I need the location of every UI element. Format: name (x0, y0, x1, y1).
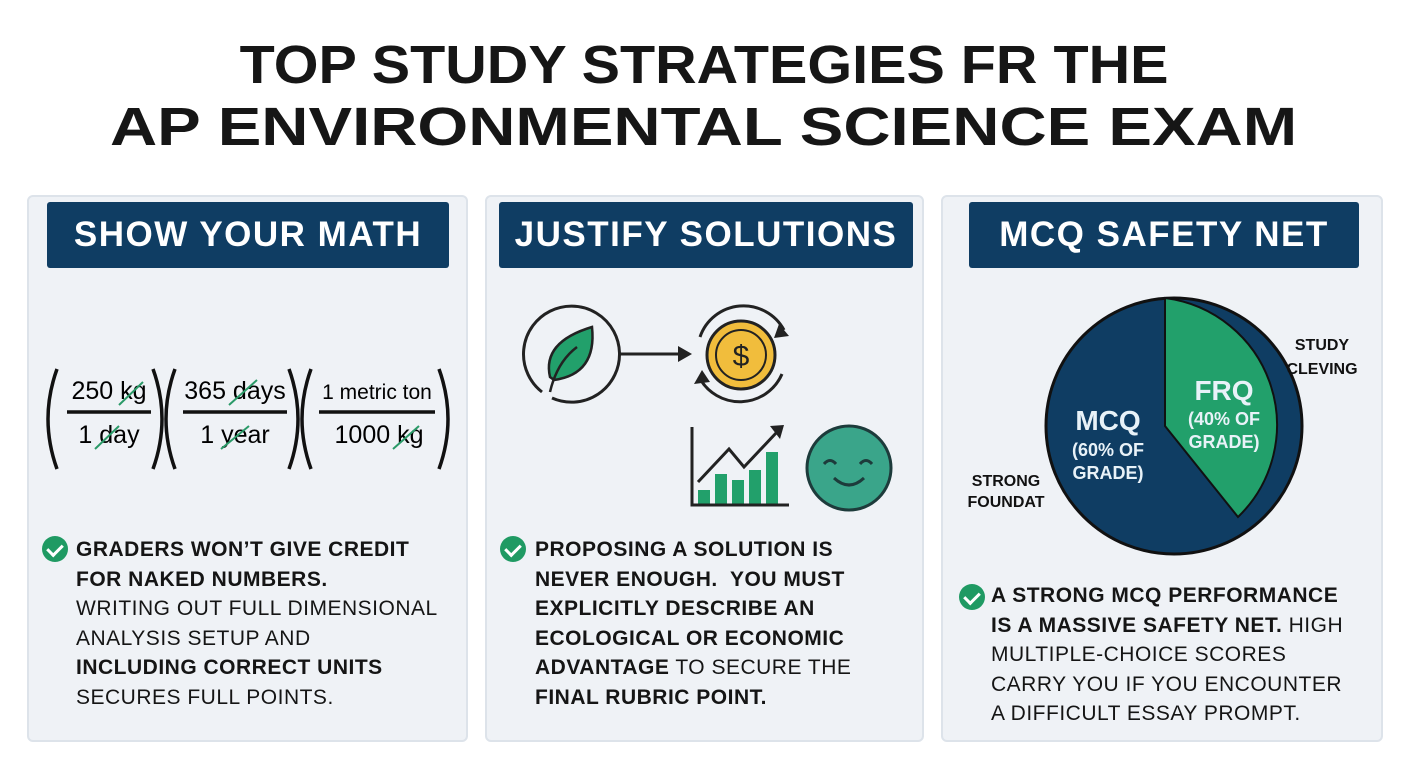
text block: FOR NAKED NUMBERS. (76, 568, 328, 590)
pie chart (967, 296, 1358, 556)
text block: ANALYSIS SETUP AND (76, 626, 311, 650)
text block: ADVANTAGE TO SECURE THE (535, 656, 851, 679)
heading: justify solutions (499, 202, 913, 268)
heading: show your math: SHOW YOUR MATH (74, 215, 422, 254)
pie chart: FOUNDAT (967, 494, 1045, 511)
icon: check (959, 584, 985, 610)
title (110, 35, 1298, 157)
text block (76, 538, 438, 708)
text block: NEVER ENOUGH. YOU MUST (535, 568, 845, 590)
icon: check (42, 536, 68, 562)
pie chart: STUDY (1295, 337, 1349, 354)
heading: show your math (47, 202, 449, 268)
text block: A STRONG MCQ PERFORMANCE (991, 584, 1338, 607)
text block: MULTIPLE-CHOICE SCORES (991, 643, 1286, 666)
pie chart: CLEVING (1286, 361, 1358, 378)
text block: CARRY YOU IF YOU ENCOUNTER (991, 672, 1342, 696)
text block: SECURES FULL POINTS. (76, 686, 334, 708)
text block: GRADERS WON’T GIVE CREDIT (76, 538, 409, 561)
text block: INCLUDING CORRECT UNITS (76, 656, 383, 679)
pie chart: GRADE) (1188, 432, 1260, 452)
heading: mcq safety net: MCQ SAFETY NET (999, 215, 1329, 254)
text block: WRITING OUT FULL DIMENSIONAL (76, 597, 438, 620)
heading: justify solutions: JUSTIFY SOLUTIONS (515, 215, 897, 254)
panel: show your math (27, 195, 468, 742)
pie chart: GRADE) (1072, 463, 1144, 483)
heading: mcq safety net (969, 202, 1359, 268)
icons: leaf to money, chart, earth (522, 304, 892, 512)
text block: IS A MASSIVE SAFETY NET. HIGH (991, 614, 1343, 636)
pie chart: (40% OF (1188, 409, 1260, 429)
equation: dimensional analysis: 1000 kg (335, 421, 423, 449)
equation: dimensional analysis: 1 day (78, 421, 140, 449)
text block: FINAL RUBRIC POINT. (535, 686, 767, 708)
equation: dimensional analysis: 250 kg (71, 377, 147, 405)
title: AP ENVIRONMENTAL SCIENCE EXAM (110, 97, 1298, 157)
text block: PROPOSING A SOLUTION IS (535, 538, 833, 561)
equation: dimensional analysis (46, 368, 450, 470)
panel: mcq safety net (941, 195, 1383, 742)
pie chart: (60% OF (1072, 440, 1144, 460)
text block: EXPLICITLY DESCRIBE AN (535, 597, 815, 620)
icons: leaf to money, chart, earth: $ (733, 340, 750, 373)
panel: justify solutions (485, 195, 924, 742)
text block (991, 584, 1343, 725)
text block: ECOLOGICAL OR ECONOMIC (535, 626, 844, 650)
equation: dimensional analysis: 1 metric ton (322, 381, 432, 404)
pie chart: FRQ (1194, 375, 1254, 406)
pie chart: MCQ (1075, 405, 1141, 436)
title: TOP STUDY STRATEGIES FR THE (240, 35, 1168, 95)
text block (535, 538, 851, 708)
text block: A DIFFICULT ESSAY PROMPT. (991, 702, 1301, 725)
icon: check (500, 536, 526, 562)
equation: dimensional analysis: 365 days (184, 377, 286, 405)
equation: dimensional analysis: 1 year (200, 421, 270, 449)
pie chart: STRONG (972, 473, 1040, 490)
